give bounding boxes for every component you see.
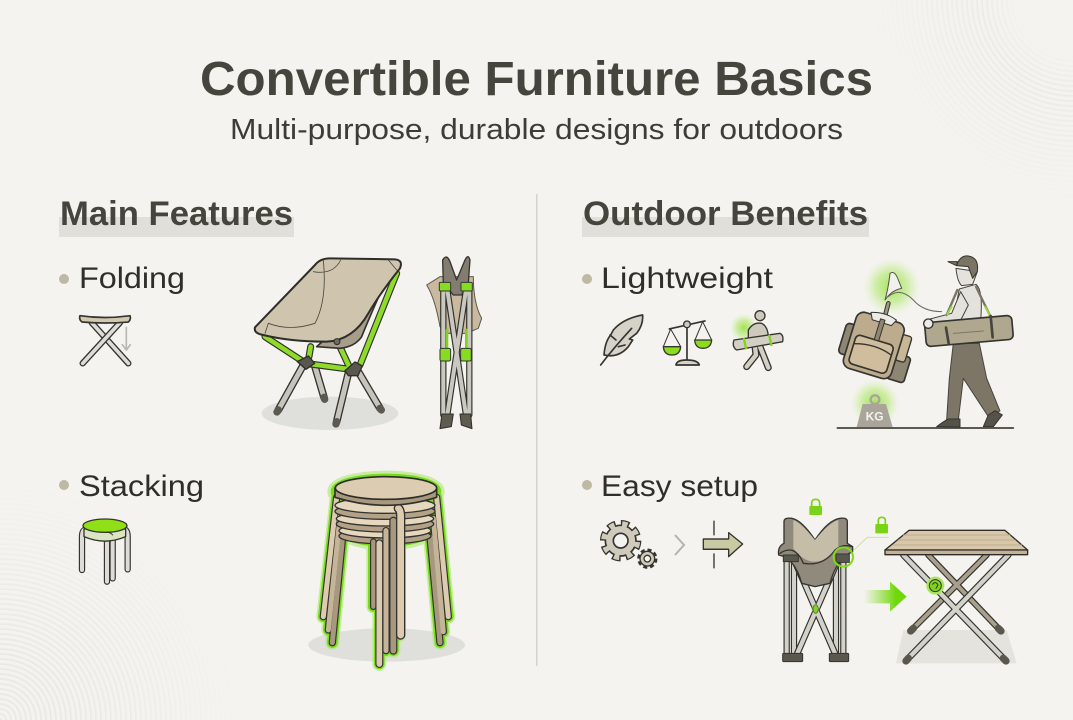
icon: chevron (675, 535, 684, 555)
label: stacking: Stacking (79, 470, 204, 503)
swoosh (885, 272, 902, 300)
panel: main features (59, 195, 482, 664)
green highlight outline (323, 478, 448, 664)
kg weight: KG (866, 409, 884, 423)
centre legs (363, 542, 383, 607)
folded chair (778, 518, 853, 662)
icon: gears (604, 524, 655, 567)
ground line (837, 425, 1013, 430)
heading: main features: Main Features (60, 195, 293, 233)
subtitle: Multi-purpose, durable designs for outdoors (230, 114, 843, 146)
icon: small stacking stool (82, 519, 128, 582)
illustration: folded chair to table (778, 499, 1028, 663)
lock icons (809, 499, 888, 551)
icon: setup arrow (703, 521, 743, 568)
panel: outdoor benefits (582, 195, 1028, 663)
icon: balance scale (663, 321, 712, 365)
icon: person carrying bag (730, 311, 783, 368)
table (885, 530, 1028, 663)
stool legs (323, 497, 448, 643)
green arrow (864, 582, 907, 612)
icon: feather (601, 315, 643, 365)
top seat (335, 488, 437, 505)
illustration: folded camp chair (427, 257, 482, 429)
heading: outdoor benefits: Outdoor Benefits (583, 195, 868, 233)
label: folding: Folding (79, 262, 185, 295)
icon: folding stool (80, 316, 130, 363)
illustration: open camp chair (255, 258, 401, 430)
illustration: person carrying bag and backpack (834, 256, 1014, 428)
title: Convertible Furniture Basics (200, 53, 873, 106)
walker (947, 343, 1000, 420)
stacked seats (339, 528, 431, 544)
backpack (834, 304, 921, 385)
panel divider (536, 194, 538, 666)
kg weight (857, 395, 893, 427)
illustration: stacked stools (308, 477, 465, 664)
label: easy setup: Easy setup (601, 470, 758, 503)
label: lightweight: Lightweight (601, 262, 774, 295)
